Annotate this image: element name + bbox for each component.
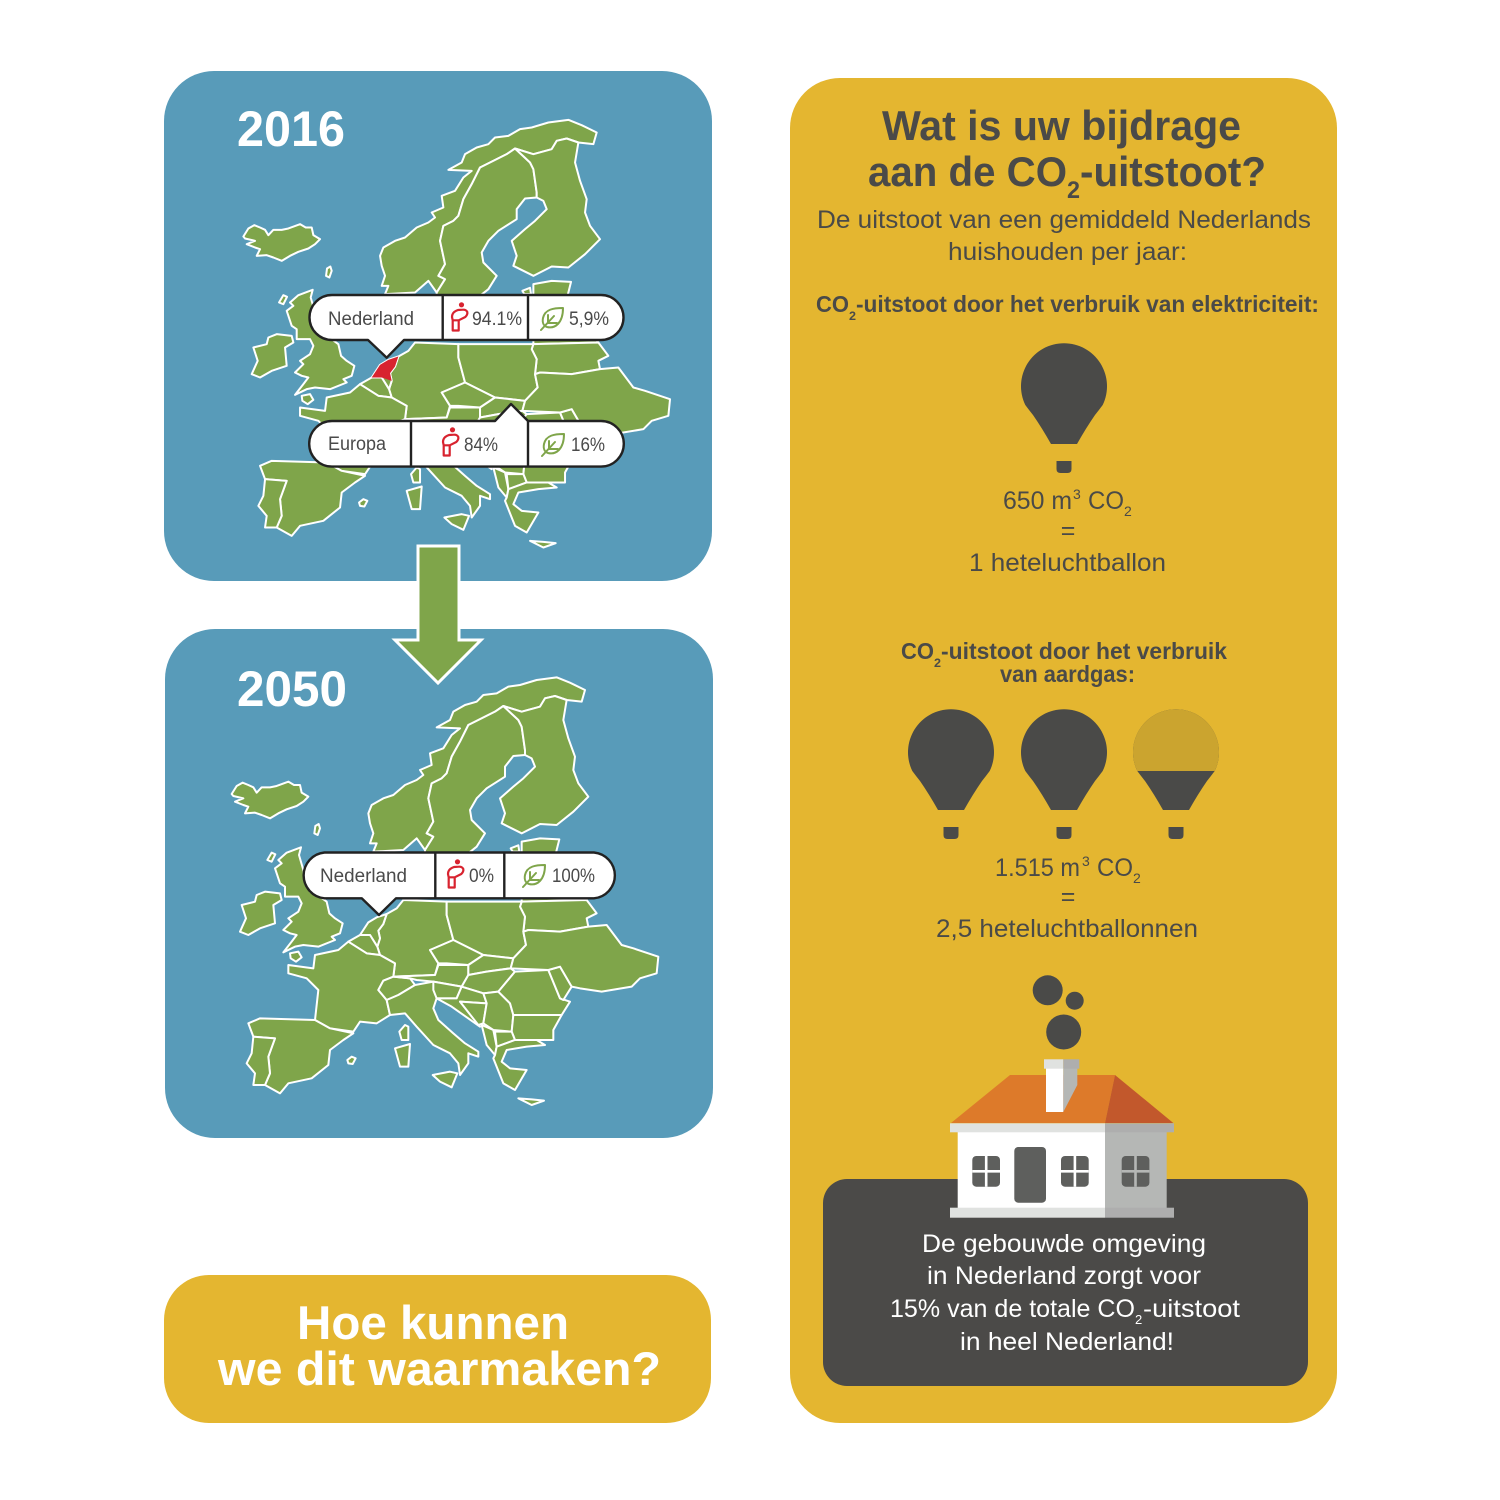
callout: Nederland 2050: Nederland xyxy=(320,866,407,887)
value: electricity: CO xyxy=(1088,487,1124,515)
heading: aardgas: -uitstoot door het verbruik xyxy=(941,638,1227,664)
panel: built environment callout: -uitstoot xyxy=(1143,1295,1240,1323)
panel: built environment callout: De gebouwde omgeving xyxy=(922,1230,1206,1258)
callout: Nederland 2050: 100% xyxy=(552,866,595,887)
panel: Hoe kunnen we dit waarmaken xyxy=(164,1275,711,1423)
value: gas: = xyxy=(1061,883,1075,911)
icon: half balloon xyxy=(1133,709,1219,839)
panel: built environment callout: in Nederland zorgt voor xyxy=(927,1262,1201,1290)
heading: elektriciteit: 2 xyxy=(849,309,856,323)
callout: Europa 2016: Europa xyxy=(328,434,386,455)
value: electricity: 3 xyxy=(1073,486,1081,502)
panel: 2050 map xyxy=(165,629,713,1138)
callout: Nederland 2016: Nederland xyxy=(328,309,414,330)
heading: aardgas: van aardgas: xyxy=(1000,661,1135,687)
callout: Nederland 2016 xyxy=(310,295,624,358)
heading: elektriciteit: CO xyxy=(816,291,849,317)
value: gas: CO xyxy=(1097,854,1133,882)
intro text: De uitstoot van een gemiddeld Nederlands xyxy=(817,206,1311,234)
heading: elektriciteit: -uitstoot door het verbruik van elektriciteit: xyxy=(856,291,1319,317)
callout: Nederland 2016: 94.1% xyxy=(472,309,522,330)
value: gas xyxy=(936,853,1198,943)
map: Europe 2050 xyxy=(232,677,658,1105)
callout: Nederland 2050: 0% xyxy=(469,866,494,887)
icon: balloon 2 of 2.5 xyxy=(1021,709,1107,839)
value: gas: 1.515 m xyxy=(995,854,1080,882)
title: Wat is uw bijdrage xyxy=(882,102,1241,149)
panel: 2016 map xyxy=(164,71,712,581)
panel: Hoe kunnen we dit waarmaken: we dit waarmaken? xyxy=(217,1342,661,1395)
heading: 2016: 2016 xyxy=(237,101,345,157)
title: -uitstoot? xyxy=(1080,148,1266,195)
panel: built environment callout xyxy=(823,1179,1308,1386)
title xyxy=(868,102,1266,204)
intro text xyxy=(817,206,1311,266)
value: electricity: 1 heteluchtballon xyxy=(969,549,1166,577)
arrow: 2016 to 2050 xyxy=(395,546,481,683)
heading: aardgas xyxy=(901,638,1227,687)
icon: balloon 1 of 2.5 xyxy=(908,709,994,839)
callout: Nederland 2050 xyxy=(304,852,615,915)
title: aan de CO xyxy=(868,148,1067,195)
heading: aardgas: CO xyxy=(901,638,934,664)
value: electricity: 2 xyxy=(1124,503,1132,519)
value: electricity: = xyxy=(1061,517,1075,545)
callout: Nederland 2016: 5,9% xyxy=(569,309,609,330)
heading: aardgas: 2 xyxy=(934,656,941,670)
callout: Europa 2016: 16% xyxy=(571,435,605,456)
panel: built environment callout: 15% van de totale CO xyxy=(890,1295,1135,1323)
icon: house with smoke xyxy=(950,975,1174,1218)
value: electricity: 650 m xyxy=(1003,487,1072,515)
panel: uw bijdrage xyxy=(790,78,1337,1423)
panel: Hoe kunnen we dit waarmaken: Hoe kunnen xyxy=(297,1296,569,1349)
intro text: huishouden per jaar: xyxy=(948,238,1187,266)
icon: balloon electricity xyxy=(1021,343,1107,473)
value: gas: 2 xyxy=(1133,870,1141,886)
value: gas: 2,5 heteluchtballonnen xyxy=(936,915,1198,943)
value: gas: 3 xyxy=(1082,853,1090,869)
panel: built environment callout: 2 xyxy=(1135,1312,1142,1327)
callout: Europa 2016 xyxy=(309,404,624,467)
panel: built environment callout: in heel Nederland! xyxy=(960,1328,1174,1356)
heading: 2050: 2050 xyxy=(237,661,347,717)
map: Europe 2016 xyxy=(243,120,670,547)
callout: Europa 2016: 84% xyxy=(464,435,498,456)
title: 2 xyxy=(1067,177,1080,204)
value: electricity xyxy=(969,486,1166,577)
